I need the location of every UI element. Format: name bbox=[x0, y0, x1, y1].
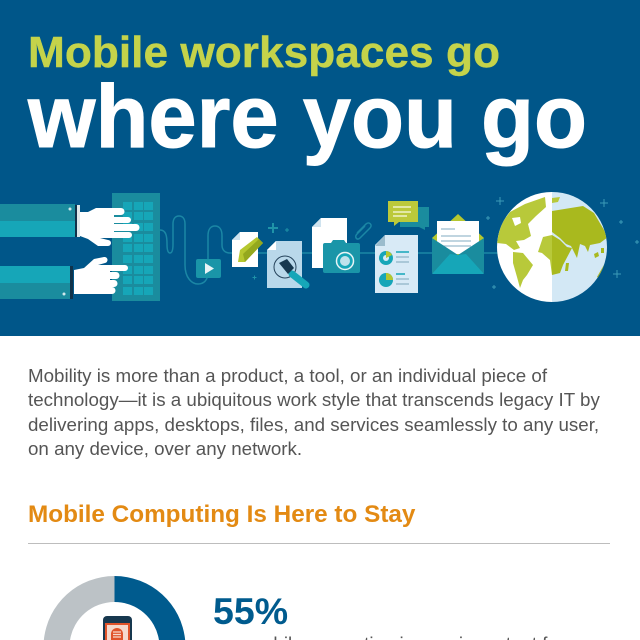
intro paragraph: technology—it is a ubiquitous work style that transcends legacy IT by bbox=[28, 389, 600, 410]
section heading: Mobile Computing Is Here to Stay bbox=[28, 501, 415, 528]
hero banner bbox=[0, 0, 640, 336]
connector cable bbox=[160, 216, 498, 284]
intro paragraph: on any device, over any network. bbox=[28, 438, 302, 459]
Africa east bbox=[552, 235, 572, 275]
Africa west bbox=[538, 235, 552, 275]
Madagascar, Australia, islands bbox=[565, 263, 569, 271]
title line 1: Mobile workspaces go bbox=[28, 28, 500, 77]
icon: paperclip bbox=[356, 223, 371, 239]
statistic 55%: 55% bbox=[213, 590, 288, 632]
icon: envelope bbox=[432, 214, 484, 274]
title line 2: where you go bbox=[27, 66, 587, 166]
intro paragraph bbox=[28, 365, 600, 459]
upper arm and hand bbox=[0, 204, 140, 246]
icon: camera bbox=[323, 240, 360, 273]
icon: vector design sheet bbox=[267, 241, 306, 288]
Eurasia bbox=[552, 206, 608, 258]
keyboard bbox=[112, 193, 160, 301]
icon: video player bbox=[196, 259, 221, 278]
icon: globe bbox=[497, 192, 609, 302]
icon: document with pencil bbox=[232, 232, 263, 267]
lower arm and hand bbox=[0, 257, 128, 299]
intro paragraph: delivering apps, desktops, files, and services seamlessly to any user, bbox=[28, 414, 599, 435]
icon: blank document bbox=[312, 218, 347, 268]
icon: chat bubbles bbox=[388, 201, 429, 230]
sparkles right bbox=[486, 197, 639, 289]
intro paragraph: Mobility is more than a product, a tool, or an individual piece of bbox=[28, 365, 547, 386]
North America bbox=[497, 197, 546, 250]
South America bbox=[513, 252, 533, 288]
icon: phone bbox=[103, 616, 132, 640]
sparkles left bbox=[252, 223, 289, 280]
icon: report document with pie charts bbox=[375, 235, 418, 293]
